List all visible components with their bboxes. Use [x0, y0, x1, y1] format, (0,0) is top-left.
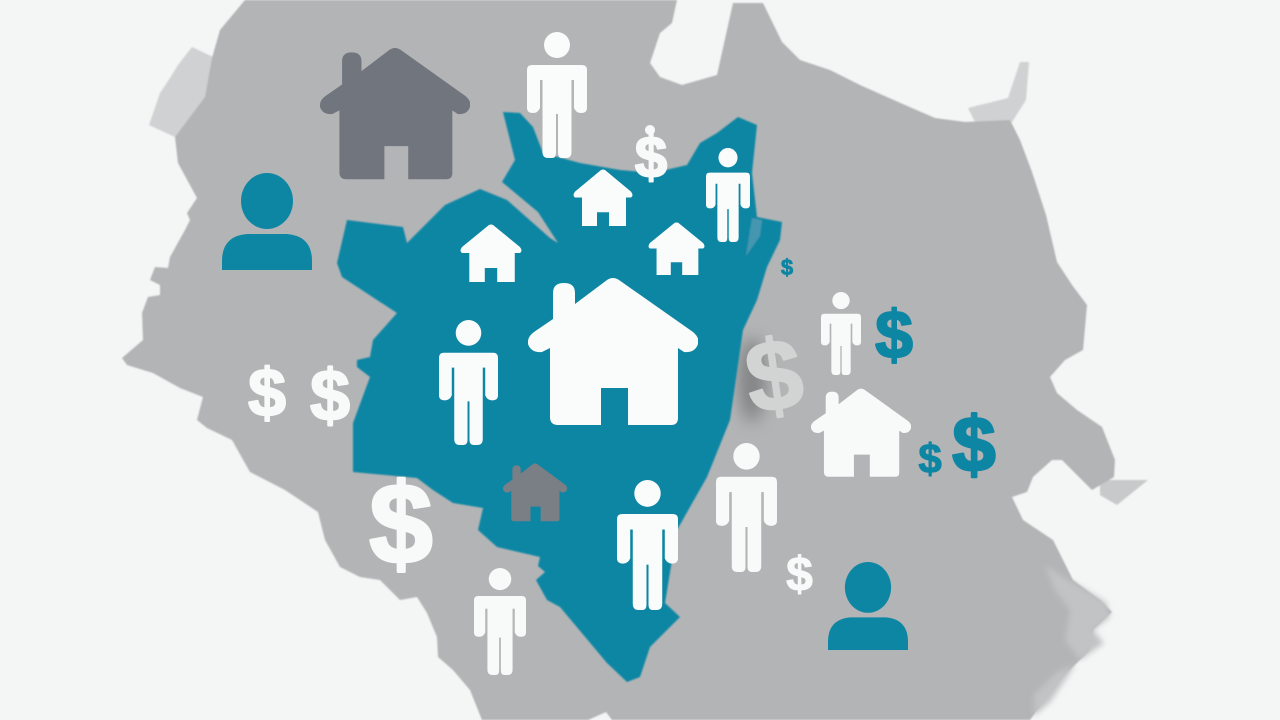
icon: dollar white top: $: [635, 125, 667, 190]
icon: dollar white large: $: [369, 461, 433, 588]
icon: person centre left: [439, 320, 498, 445]
icon: dollar teal right: $: [875, 297, 913, 373]
map: pale fading coastline: [1034, 565, 1110, 716]
icon: teal user right: [828, 562, 908, 650]
icon: dollar teal small: $: [918, 435, 942, 482]
icon: dollar pale large: $: [739, 317, 809, 435]
shadow beside the region: [738, 338, 766, 422]
map: highlighted teal region: [337, 112, 782, 682]
icon: large white house: [528, 278, 698, 425]
icon: small dark house: [503, 463, 567, 521]
icon: large dark house: [320, 48, 470, 179]
icon: dollar white left: $: [248, 355, 286, 431]
icon: dollar white small: $: [786, 548, 813, 602]
icon: dollar teal medium: $: [952, 400, 996, 488]
icon: person lower right: [716, 443, 777, 572]
icon: person top: [527, 32, 587, 158]
icon: person right: [821, 292, 861, 375]
icon: small white house left: [461, 224, 521, 282]
icon: person bottom left: [474, 568, 526, 675]
icon: dollar white second: $: [310, 356, 350, 436]
icon: person bottom centre: [617, 480, 678, 610]
icon: white house outside region: [811, 389, 911, 477]
icon: teal user left: [222, 173, 312, 270]
icon: dollar teal tiny: $: [781, 255, 793, 280]
icon: small white house top: [574, 169, 632, 226]
icon: person upper right: [706, 148, 750, 242]
icon: small white house right: [648, 222, 705, 275]
